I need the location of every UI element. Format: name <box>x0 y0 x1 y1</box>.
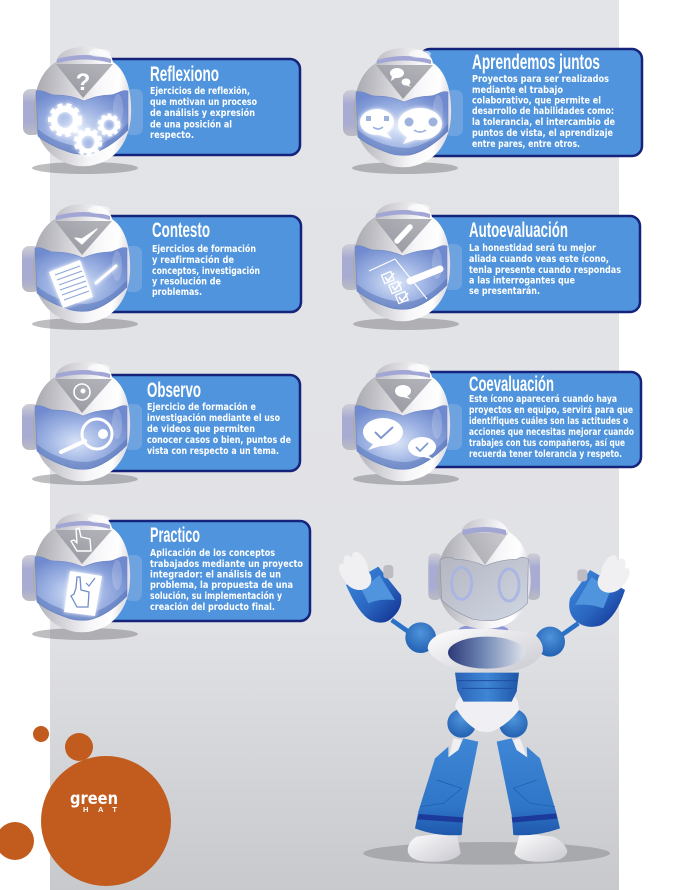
icon: checklist and marker <box>369 259 440 304</box>
icon: eye <box>74 384 90 400</box>
shadow: Observo robot head <box>32 473 138 485</box>
robot right knee strut <box>513 738 527 758</box>
text: Observo description: conocer casos o bien, puntos de <box>147 435 291 446</box>
panel: Practico <box>100 521 310 621</box>
icon: magnifying glass <box>61 419 112 452</box>
robot head stripe <box>463 527 506 535</box>
robot left foot <box>408 832 461 862</box>
text: Coevaluación description: proyectos en equipo, servirá para que <box>469 404 633 416</box>
text: Contesto description: y resolución de <box>152 276 221 288</box>
text: Reflexiono description: Ejercicios de reflexión, <box>150 85 250 97</box>
icon: speech bubbles with checks <box>363 418 436 460</box>
icon: pointing hand <box>71 528 91 551</box>
heading: Contesto: Contesto <box>152 219 210 242</box>
robot ears <box>428 553 540 600</box>
card: Observo <box>22 362 300 485</box>
card: Reflexiono <box>23 47 300 174</box>
robot visor <box>440 557 528 621</box>
text: Contesto description: problemas. <box>152 287 202 298</box>
text: Reflexiono description: de una posición al <box>150 118 232 130</box>
shadow: Autoevaluación robot head <box>353 318 459 330</box>
shadow: Reflexiono robot head <box>32 162 138 174</box>
robot leg seams <box>420 780 555 807</box>
heading: Practico: Practico <box>150 524 200 547</box>
icon: talking faces <box>360 108 442 144</box>
robot abdomen <box>455 673 519 702</box>
text: Practico description <box>150 547 303 613</box>
text: Autoevaluación description <box>469 242 621 297</box>
text: Contesto description: conceptos, investigación <box>152 265 260 277</box>
text: Observo description <box>147 401 291 457</box>
shadow: Practico robot head <box>32 628 138 640</box>
robot right forearm panel <box>575 577 610 608</box>
robot head: Reflexiono <box>23 47 143 166</box>
robot left forearm panel <box>362 575 395 603</box>
robot left forearm <box>346 567 401 623</box>
card: Practico <box>22 513 310 640</box>
heading: Autoevaluación: Autoevaluación <box>469 219 568 242</box>
text: Reflexiono description: que motivan un proceso <box>150 97 257 108</box>
card: Contesto <box>22 204 301 330</box>
shadow: robot <box>363 842 610 865</box>
text: Contesto description <box>152 243 260 298</box>
robot head: Aprendemos <box>343 48 463 167</box>
illustration: full body robot <box>336 518 633 865</box>
robot neck <box>458 624 508 636</box>
robot right hand <box>577 553 633 598</box>
robot right foot <box>514 833 567 862</box>
text: Practico description: integrador: el análisis de un <box>150 568 281 580</box>
text: Reflexiono description: respecto. <box>150 130 194 141</box>
text: Aprendemos description: desarrollo de habilidades como: <box>472 106 614 117</box>
robot left knee strut <box>448 738 462 760</box>
robot leg bands <box>417 813 557 823</box>
card: Coevaluación <box>342 362 641 485</box>
text: Coevaluación description: acciones que necesitas mejorar cuando <box>469 427 634 438</box>
robot right leg <box>497 738 560 835</box>
robot right forearm <box>569 570 625 627</box>
text: Practico description: Aplicación de los conceptos <box>150 547 275 559</box>
heading: Observo: Observo <box>147 379 201 402</box>
icon: question mark: ? <box>76 69 90 96</box>
text: Coevaluación description: Este ícono aparecerá cuando haya <box>469 393 617 405</box>
heading: Reflexiono: Reflexiono <box>150 63 219 86</box>
text: Coevaluación description: identifiques cuáles son las actitudes o <box>469 415 628 427</box>
text: Contesto description: y reafirmación de <box>152 254 234 266</box>
robot head: Observo <box>22 362 142 481</box>
panel: Coevaluación <box>420 372 641 467</box>
text: Observo description: vista con respecto a un tema. <box>147 446 279 457</box>
card: Aprendemos juntos <box>343 48 642 174</box>
robot head <box>437 518 531 629</box>
robot eyes <box>452 567 519 601</box>
icon: marker <box>397 227 410 241</box>
icon: small speech bubbles <box>390 68 411 87</box>
robot head: Coevaluación <box>342 362 462 481</box>
text: Aprendemos description: Proyectos para ser realizados <box>472 74 609 85</box>
robot chest oval <box>448 637 525 669</box>
robot pelvis <box>455 697 519 732</box>
text: Aprendemos description: colaborativo, que permite el <box>472 96 601 106</box>
robot abdomen ribs <box>457 681 517 688</box>
text: Practico description: solución, su implementación y <box>150 590 282 602</box>
text: Aprendemos description: mediante el trabajo <box>472 85 563 96</box>
text: Autoevaluación description: a las interrogantes que <box>469 276 575 286</box>
decorative orange circles <box>0 726 171 886</box>
text: Coevaluación description: recuerda tener tolerancia y respeto. <box>469 449 622 460</box>
robot left hand <box>336 549 393 595</box>
text: Observo description: Ejercicio de formación e <box>147 401 256 413</box>
text: Reflexiono description <box>150 85 257 141</box>
panel: Contesto <box>100 216 301 312</box>
text: Aprendemos description <box>472 74 615 150</box>
robot right stick arm <box>562 623 578 635</box>
panel: Observo <box>100 375 300 471</box>
text: Practico description: creación del producto final. <box>150 601 275 613</box>
text: Observo description: de videos que permiten <box>147 424 255 435</box>
robot left stick arm <box>392 620 408 632</box>
robot left shoulder <box>405 622 436 653</box>
shadow: Coevaluación robot head <box>353 473 459 485</box>
robot forehead <box>462 533 508 565</box>
robot head: Contesto <box>22 204 142 323</box>
card: Autoevaluación <box>342 202 640 330</box>
icon: paper and pen <box>49 260 116 308</box>
text: Autoevaluación description: se presentarán. <box>469 285 540 297</box>
text: Coevaluación description: trabajes con tus compañeros, así que <box>469 437 625 449</box>
text: Autoevaluación description: La honestidad será tu mejor <box>469 242 596 254</box>
text: Contesto description: Ejercicios de formación <box>152 243 256 255</box>
text: Practico description: trabajados mediante un proyecto <box>150 559 303 570</box>
logo: green hat: HAT <box>83 805 117 814</box>
robot right shoulder <box>535 627 565 657</box>
text: Autoevaluación description: tenla presente cuando respondas <box>469 265 621 276</box>
robot hip joints <box>447 709 528 738</box>
icon: touch card <box>64 571 102 616</box>
text: Reflexiono description: de análisis y expresión <box>150 107 255 119</box>
heading: Coevaluación: Coevaluación <box>469 373 554 396</box>
text: Practico description: problema, la propuesta de una <box>150 580 293 591</box>
text: Aprendemos description: puntos de vista, el aprendizaje <box>472 128 613 139</box>
text: Aprendemos description: entre pares, entre otros. <box>472 139 580 150</box>
panel: Autoevaluación <box>420 216 640 312</box>
text: Observo description: investigación mediante el uso <box>147 412 280 424</box>
robot chest <box>428 629 543 673</box>
icon: gears <box>50 105 119 154</box>
icon: small speech bubble <box>395 385 411 399</box>
robot head: Autoevaluación <box>342 202 462 321</box>
panel: Aprendemos juntos <box>420 49 642 156</box>
panel: Reflexiono <box>100 59 300 155</box>
logo: green hat: green <box>70 789 118 809</box>
robot left leg <box>415 738 478 835</box>
text: Autoevaluación description: aliada cuando veas este ícono, <box>469 253 609 265</box>
heading: Aprendemos juntos: Aprendemos juntos <box>472 51 600 74</box>
shadow: Contesto robot head <box>32 318 138 330</box>
text: Aprendemos description: la tolerancia, el intercambio de <box>472 117 615 128</box>
icon: check mark <box>75 229 97 244</box>
shadow: Aprendemos robot head <box>352 162 458 174</box>
robot head: Practico <box>22 513 142 632</box>
text: Coevaluación description <box>469 393 634 460</box>
